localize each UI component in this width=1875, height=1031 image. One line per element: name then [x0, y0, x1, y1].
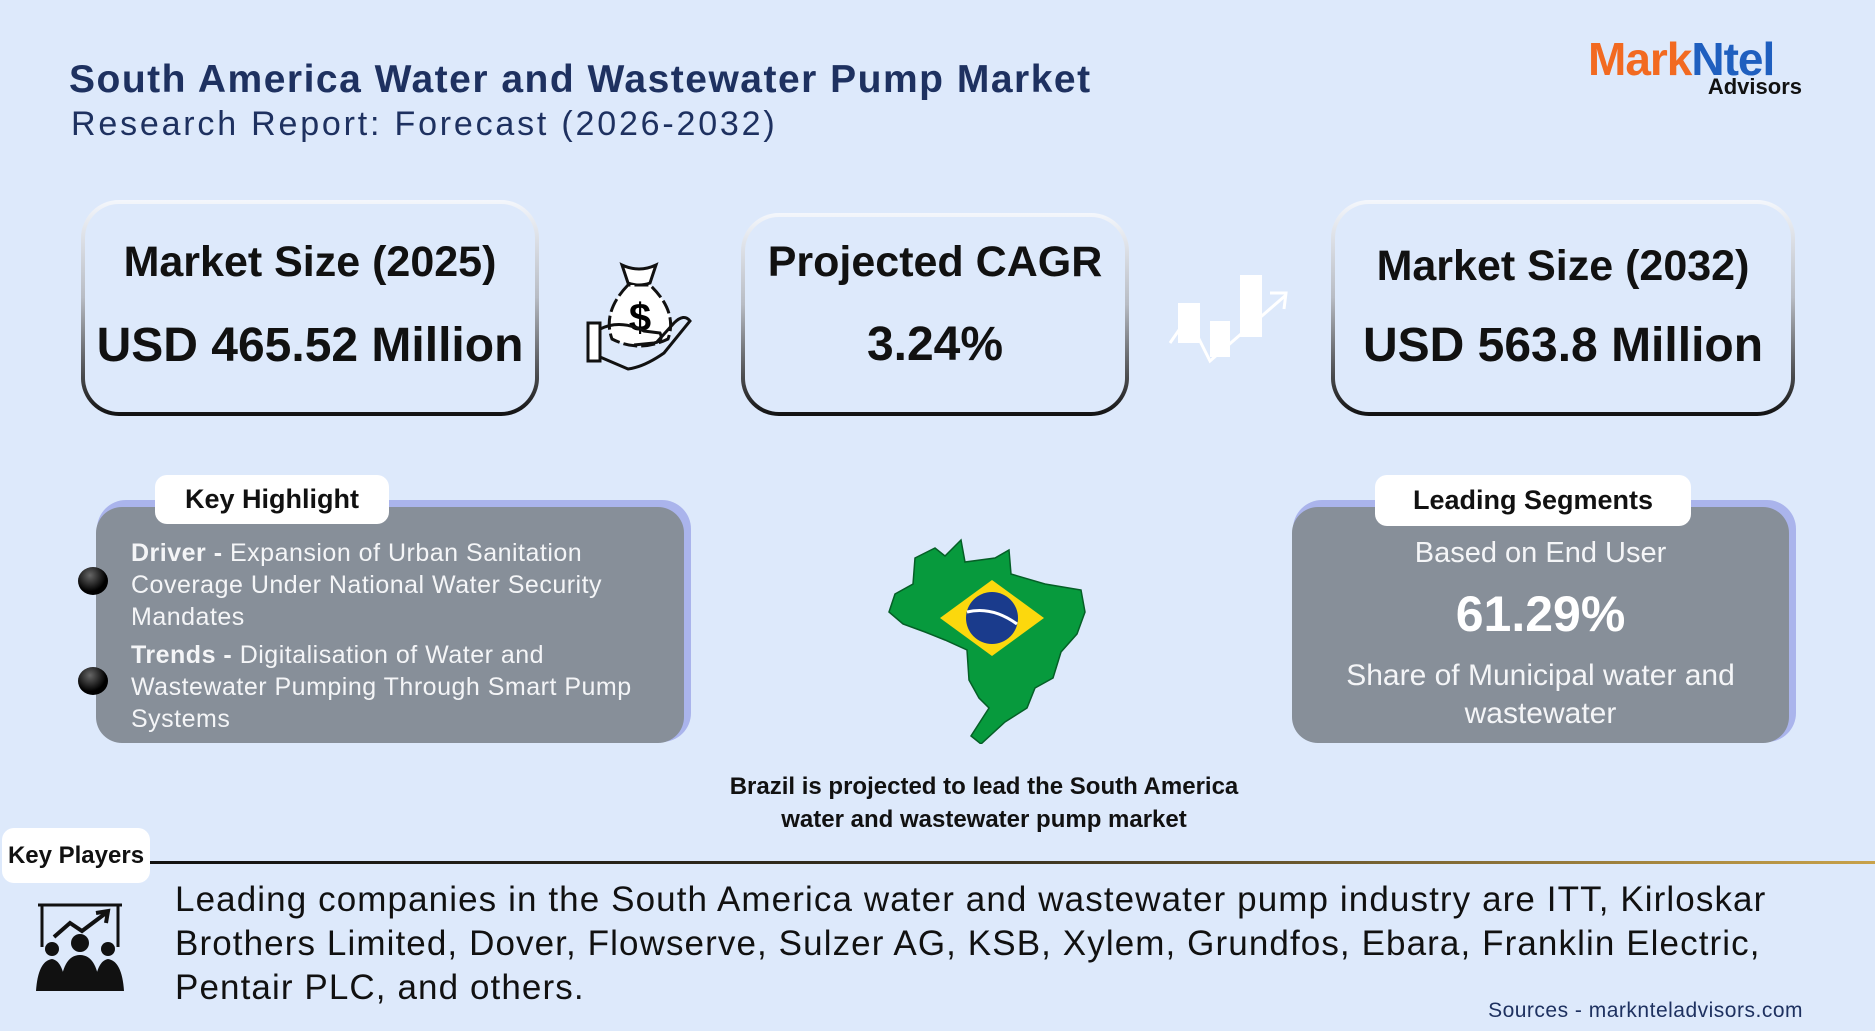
divider line [150, 861, 1875, 864]
tab: leading segments: Leading Segments [1413, 485, 1653, 515]
title: South America Water and Wastewater Pump Market [69, 58, 1092, 101]
card: market size 2032: Market Size (2032) [1377, 242, 1749, 290]
panel: key highlight [96, 507, 684, 743]
card: projected CAGR: Projected CAGR [768, 238, 1102, 286]
text: trends: Trends - Digitalisation of Water and Wastewater Pumping Through Smart Pump Systems [131, 641, 632, 733]
text: key players: Leading companies in the South America water and wastewater pump industry are ITT, Kirloskar Brothers Limited, Dover, Flowserve, Sulzer AG, KSB, Xylem, Grundfos, Ebara, Franklin Electric, Pentair PLC, and others. [175, 880, 1766, 1007]
icon: key players [36, 904, 124, 991]
map: brazil [888, 538, 1086, 744]
text: driver: Driver - Expansion of Urban Sanitation Coverage Under National Water Security Mandates [131, 539, 602, 631]
logo [1588, 33, 1802, 99]
panel: leading segments [1292, 507, 1789, 743]
tab: leading segments [1375, 475, 1691, 526]
icon: growth chart [1169, 275, 1288, 364]
caption: brazil: Brazil is projected to lead the South America water and wastewater pump market [730, 773, 1238, 833]
card: projected CAGR: 3.24% [867, 318, 1003, 371]
tab: key highlight: Key Highlight [185, 484, 359, 514]
bullet: trends [78, 667, 108, 695]
card: projected CAGR [741, 213, 1129, 416]
sources: Sources - marknteladvisors.com [1488, 999, 1803, 1022]
card: market size 2032: USD 563.8 Million [1363, 319, 1763, 372]
card: market size 2025: USD 465.52 Million [97, 319, 523, 372]
card: market size 2025 [81, 200, 539, 416]
logo: MarkNtel [1588, 33, 1774, 85]
card: market size 2025: Market Size (2025) [124, 238, 496, 286]
tab: key highlight [155, 475, 389, 524]
tab: key players [2, 828, 150, 883]
logo: Advisors [1708, 74, 1802, 99]
bullet: driver [78, 567, 108, 595]
text: based on end user: Based on End User [1415, 537, 1666, 569]
text: share: Share of Municipal water and wastewater [1346, 659, 1735, 730]
icon: money bag in hand [586, 262, 692, 370]
subtitle: Research Report: Forecast (2026-2032) [71, 105, 777, 143]
icon: money bag in hand: $ [629, 296, 651, 340]
card: market size 2032 [1331, 200, 1795, 416]
value: 61.29%: 61.29% [1456, 586, 1625, 642]
tab: key players: Key Players [8, 842, 144, 869]
